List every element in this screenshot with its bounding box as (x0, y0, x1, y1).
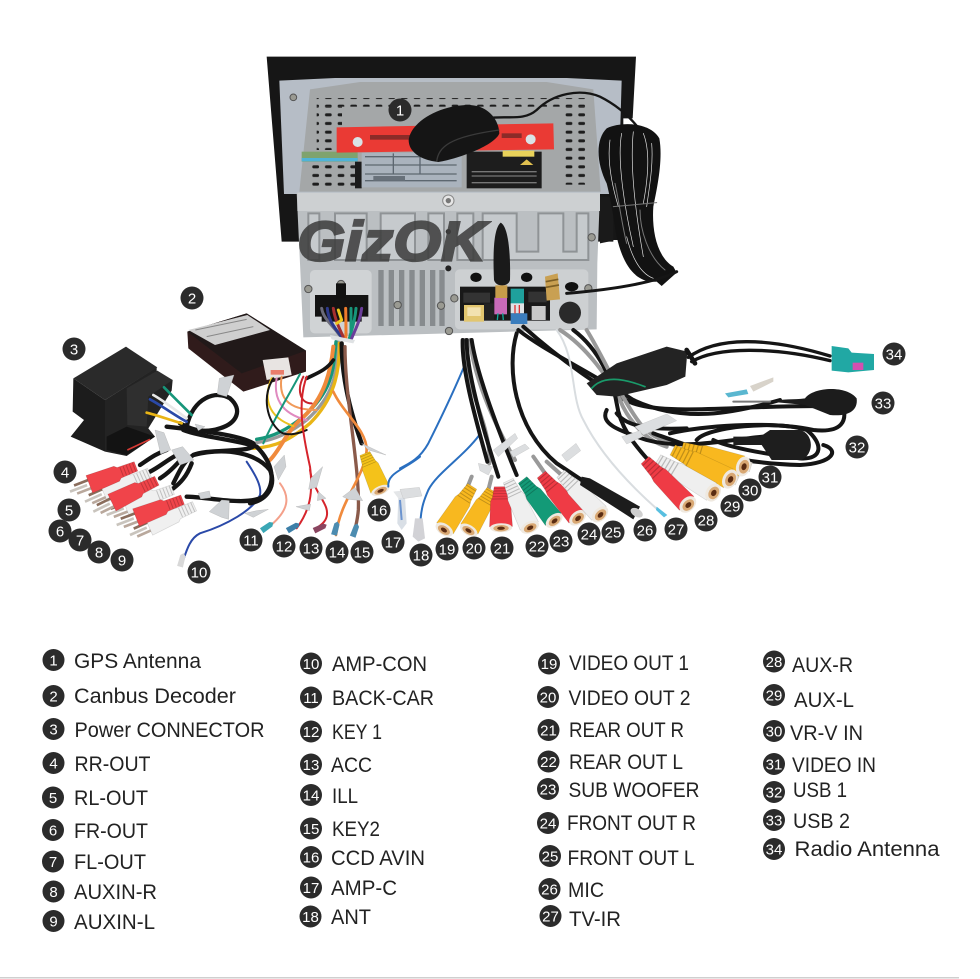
legend 17: 17 (303, 880, 319, 897)
legend 15: 15 (303, 821, 319, 838)
badge 19: 19 (439, 542, 455, 558)
legend 7: FL-OUT (74, 851, 146, 874)
thin white MIC wire (557, 330, 660, 512)
legend 31: 31 (766, 756, 782, 774)
legend 32 (763, 779, 847, 803)
legend 10: 10 (303, 656, 319, 673)
badge 15 (350, 540, 374, 564)
legend 22: REAR OUT L (569, 751, 683, 774)
cable tags (155, 375, 386, 519)
badge 17: 17 (385, 534, 401, 552)
badge 26: 26 (637, 522, 653, 540)
legend 30 (763, 720, 863, 745)
badge 29: 29 (724, 498, 740, 516)
legend 9: 9 (49, 914, 58, 930)
legend 11: 11 (303, 690, 319, 707)
grey plug (532, 306, 546, 320)
legend 34: 34 (766, 842, 782, 858)
legend 4: 4 (49, 756, 58, 772)
legend 16: CCD AVIN (331, 847, 425, 870)
silver rear face (297, 193, 600, 337)
legend 6: FR-OUT (74, 820, 148, 843)
blue wires (400, 368, 479, 518)
legend 1: 1 (49, 652, 58, 670)
legend 28: AUX-R (792, 654, 853, 677)
legend column 2 (300, 652, 434, 929)
legend 29: 29 (766, 688, 782, 704)
legend 5: 5 (49, 790, 57, 807)
power port panel (310, 270, 372, 333)
legend 20: 20 (540, 690, 556, 706)
badge 12: 12 (276, 538, 292, 556)
legend 15: KEY2 (332, 818, 380, 841)
badge 32: 32 (849, 440, 865, 456)
badge 25: 25 (605, 524, 621, 542)
power harness connector (315, 283, 368, 322)
legend 13: ACC (331, 754, 372, 777)
legend 14: ILL (332, 785, 358, 808)
legend 18: 18 (302, 909, 319, 926)
badge 29 (720, 494, 744, 518)
decoder wires (183, 374, 327, 560)
legend 34: Radio Antenna (794, 838, 940, 861)
badge 6 (48, 520, 72, 542)
badge 7 (68, 528, 92, 552)
black MIC jack (580, 477, 644, 519)
badge 33: 33 (875, 396, 891, 412)
legend 7 (42, 850, 146, 874)
power connector block (71, 347, 173, 456)
legend column 4 (763, 650, 940, 861)
wiring harness, decoder and power connector (67, 308, 420, 567)
legend column 3 (537, 652, 700, 931)
badge 1: 1 (396, 102, 404, 120)
legend 29 (763, 684, 854, 712)
RCA sockets 19-25 (433, 467, 612, 540)
legend 17: AMP-C (331, 877, 397, 900)
badge 3: 3 (70, 342, 78, 358)
badge 12 (272, 534, 296, 558)
legend 6: 6 (49, 822, 57, 840)
badge 16: 16 (371, 502, 387, 520)
badge 31: 31 (762, 470, 778, 486)
green wire (592, 379, 645, 388)
legend 19: VIDEO OUT 1 (569, 652, 689, 675)
badge 30 (738, 478, 762, 502)
legend 8: 8 (49, 884, 58, 901)
legend 33: USB 2 (793, 810, 850, 833)
legend 17 (300, 876, 397, 900)
USB 1 plug (733, 430, 811, 460)
legend 32: USB 1 (793, 779, 847, 802)
pink fakra plug (494, 298, 507, 320)
teal fakra plug (511, 289, 527, 324)
badge 22: 22 (529, 538, 545, 556)
badge 28: 28 (698, 512, 714, 530)
legend 19: 19 (541, 656, 557, 673)
badge 11 (240, 528, 262, 552)
legend 25: FRONT OUT L (568, 847, 694, 870)
legend 32: 32 (766, 784, 782, 802)
legend 27: TV-IR (569, 908, 621, 931)
badge 30: 30 (742, 482, 758, 500)
legend 4 (42, 752, 151, 776)
badge 21 (490, 536, 514, 560)
badge 6: 6 (56, 524, 64, 540)
black front bezel (267, 57, 636, 242)
wire tips 10-15 (177, 520, 360, 567)
legend 33: 33 (766, 812, 782, 830)
legend 33 (763, 809, 850, 833)
watermark: GizOK (297, 210, 490, 273)
AMP-C plug (393, 488, 420, 530)
badge 24 (578, 522, 600, 546)
badge 10 (188, 560, 210, 584)
badge 21: 21 (494, 540, 510, 558)
red warning sticker (337, 123, 554, 153)
badge 20: 20 (466, 540, 482, 558)
badge 23 (550, 530, 572, 552)
badge 5 (58, 498, 80, 522)
legend 15 (300, 818, 380, 841)
legend 12: KEY 1 (332, 721, 382, 744)
legend 7: 7 (49, 854, 57, 871)
badge 2: 2 (188, 290, 196, 308)
legend 24: FRONT OUT R (567, 812, 696, 835)
harness fan at head unit (322, 308, 362, 338)
black amp box (587, 347, 687, 397)
legend 9: AUXIN-L (74, 911, 155, 934)
badge 27: 27 (668, 522, 684, 538)
legend 14 (300, 784, 358, 808)
legend 25: 25 (542, 848, 558, 866)
legend 9 (42, 910, 155, 934)
CCD AVIN yellow plug (356, 450, 391, 498)
legend 28: 28 (766, 654, 782, 671)
legend 4: RR-OUT (74, 753, 151, 776)
decoder box (187, 313, 306, 392)
badge 26 (634, 518, 656, 542)
FR-OUT and FL-OUT plugs (89, 472, 176, 524)
legend 21: REAR OUT R (569, 719, 684, 742)
USB 2 plug (733, 389, 857, 415)
legend 14: 14 (303, 788, 319, 804)
legend 18: ANT (331, 906, 371, 929)
legend 12 (300, 720, 382, 744)
badge 1 (388, 98, 412, 122)
badge 8: 8 (95, 544, 103, 562)
AUXIN-R and AUXIN-L plugs (113, 491, 198, 544)
RR-OUT and RL-OUT plugs (67, 458, 153, 510)
RCA sockets 28-31 (638, 438, 753, 516)
legend 22: 22 (540, 754, 557, 771)
legend 26: 26 (541, 882, 558, 898)
output cables and RCA sockets (400, 327, 874, 542)
legend 3: Power CONNECTOR (74, 719, 264, 742)
badge 28 (694, 508, 718, 532)
blue AMP-C wire (388, 457, 420, 487)
GPS antenna puck (409, 105, 499, 162)
wire bundle to decoder (253, 342, 367, 535)
gold antenna jack (545, 273, 560, 301)
badge 23: 23 (553, 534, 569, 550)
legend 3: 3 (49, 722, 58, 738)
badge 17 (382, 530, 404, 554)
main cable bundle (463, 327, 844, 493)
badge 9 (110, 548, 134, 572)
badge 14: 14 (329, 544, 345, 562)
badge 25 (602, 520, 624, 544)
gold USB port (464, 303, 494, 322)
badge 19 (436, 538, 458, 560)
legend 20: VIDEO OUT 2 (568, 687, 690, 710)
black round grommet (559, 302, 581, 324)
legend 1: GPS Antenna (74, 650, 201, 673)
badge 18 (410, 544, 432, 566)
legend 26 (538, 878, 604, 902)
badge 8 (88, 540, 110, 564)
screws (290, 94, 595, 335)
legend 30: VR-V IN (790, 722, 863, 745)
legend 23: 23 (540, 782, 556, 798)
badge 24: 24 (581, 526, 597, 544)
legend 27: 27 (542, 908, 559, 926)
legend 5 (42, 786, 148, 810)
legend 8 (42, 880, 157, 904)
stub antenna (494, 223, 510, 298)
legend 16: 16 (303, 850, 319, 866)
legend 30: 30 (766, 724, 782, 740)
cable tags (400, 414, 677, 499)
legend 24: 24 (540, 816, 556, 832)
GPS cable and coil (487, 93, 677, 293)
legend 23: SUB WOOFER (568, 779, 700, 802)
black spec label (467, 151, 542, 188)
badge 22 (526, 534, 548, 558)
TV-IR tip (656, 507, 667, 517)
badge 15: 15 (354, 544, 370, 562)
badge 10: 10 (191, 564, 207, 582)
teal fakra connector (832, 346, 874, 372)
vent slots (378, 270, 445, 326)
harness cable tie (330, 335, 355, 343)
badge 34: 34 (886, 346, 902, 364)
badge 31 (758, 466, 782, 488)
badge 13: 13 (303, 540, 319, 558)
badge 5: 5 (65, 502, 73, 520)
legend 28 (763, 650, 853, 677)
badge 4 (54, 460, 76, 484)
badge 32 (846, 436, 868, 458)
legend 10: AMP-CON (332, 653, 427, 676)
legend 21: 21 (540, 722, 557, 740)
badge 33 (872, 392, 894, 414)
ring terminal (725, 377, 773, 397)
legend 12: 12 (303, 724, 319, 741)
legend 2: 2 (49, 688, 58, 706)
green circuit strip (302, 152, 358, 162)
badge 20 (462, 536, 486, 560)
legend 26: MIC (568, 879, 604, 902)
badge 7: 7 (76, 532, 84, 550)
legend 29: AUX-L (794, 689, 854, 712)
badge 3 (62, 338, 86, 360)
legend 18 (300, 906, 371, 929)
photo: head unit rear view (267, 57, 677, 337)
right port panel (455, 269, 588, 329)
legend 31: VIDEO IN (792, 754, 876, 777)
legend 6 (42, 819, 148, 843)
wiring label (355, 153, 462, 188)
legend column 1 (42, 649, 264, 934)
badge 9: 9 (118, 552, 126, 570)
black signal cables (140, 395, 272, 503)
badge 2 (180, 286, 204, 310)
badge 13 (300, 536, 322, 560)
legend 2: Canbus Decoder (74, 685, 236, 708)
number badges on photo (48, 98, 906, 584)
legend 13: 13 (303, 757, 319, 774)
badge 11: 11 (243, 532, 259, 550)
ANT plug (413, 518, 425, 542)
perforated top cover (299, 82, 601, 192)
power connector wires (147, 387, 192, 423)
badge 18: 18 (413, 548, 429, 564)
legend 5: RL-OUT (74, 787, 148, 810)
metal chassis plate (279, 78, 622, 194)
badge 16 (368, 498, 390, 522)
legend 13 (300, 754, 372, 777)
badge 4: 4 (61, 464, 69, 482)
badge 27 (664, 518, 688, 540)
badge 34 (882, 342, 906, 366)
legend 31 (763, 753, 876, 777)
legend 8: AUXIN-R (74, 881, 157, 904)
legend 11: BACK-CAR (332, 687, 434, 710)
radio antenna cable (687, 342, 830, 363)
legend 27 (540, 905, 621, 931)
badge 14 (326, 540, 348, 564)
